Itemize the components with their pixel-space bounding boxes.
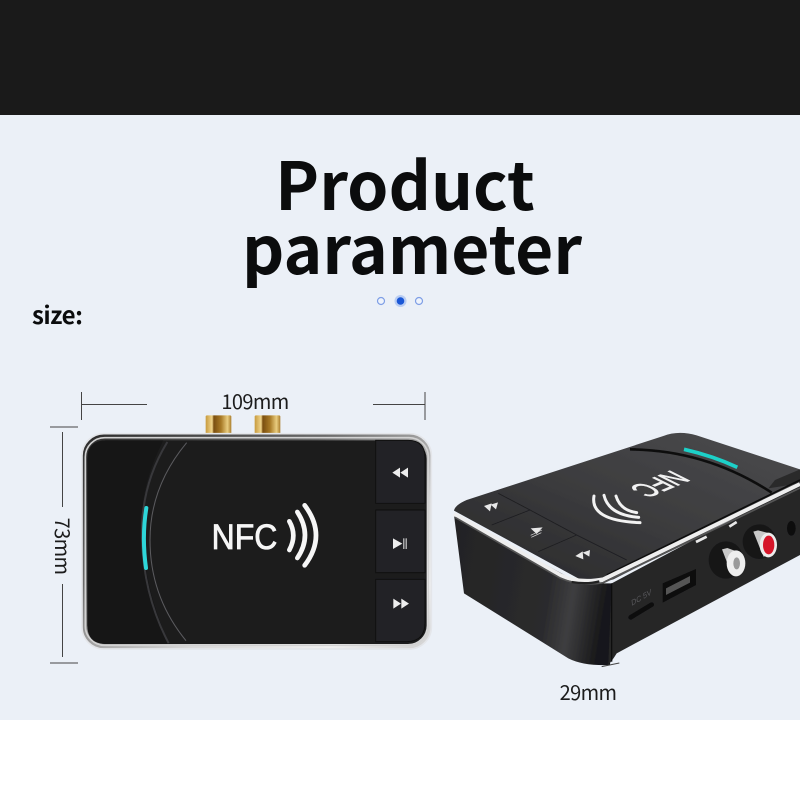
top black band [0,0,800,115]
NFC logo: NFC [622,467,697,501]
device front view [82,415,431,649]
device angled view [454,433,800,667]
cyan indicator light [684,449,737,467]
chrome frame [82,434,431,649]
dark line behind chrome [607,480,800,575]
depth dimension: 29mm: 29mm [560,677,616,706]
width dimension: 109mm: 109mm [221,386,289,415]
icon: play pause [393,538,407,549]
chrome corner shadow [572,581,599,583]
audio jack [787,521,796,536]
title: parameter [242,198,582,294]
top face [454,433,800,582]
title [242,134,582,294]
USB port [663,569,696,603]
chrome highlights [696,522,737,542]
background panel [0,115,800,720]
rear corner panel [768,469,800,488]
black top face [87,440,427,644]
DC port [631,587,652,617]
left side face [454,515,615,665]
height tick [602,663,619,667]
size label: size: [32,296,82,331]
NFC logo: NFC [212,518,277,557]
curved dark band [630,449,772,493]
NFC logo [594,467,697,523]
red RCA jack [743,524,777,559]
right side face [608,483,800,664]
left panel shade [87,440,169,644]
pagination dots [378,295,422,307]
icon: rewind [392,468,408,478]
chrome inner highlight [85,438,428,645]
DC port: DC 5V [631,587,652,608]
button icons [484,502,590,559]
width dimension: 109mm [82,386,425,420]
icon: fast forward [393,599,409,609]
height dimension: 73mm [49,427,78,663]
chrome edge [454,484,800,581]
curved lines [142,442,187,643]
control buttons [376,440,425,642]
seam line [610,583,614,662]
height dimension: 73mm: 73mm [49,518,78,574]
button outlines [492,493,627,560]
gold RCA connectors [206,415,280,435]
chrome lower shade [455,488,800,584]
cyan indicator light [144,508,146,568]
white RCA jack [709,541,745,579]
NFC logo [212,505,316,565]
title: Product [275,134,535,230]
